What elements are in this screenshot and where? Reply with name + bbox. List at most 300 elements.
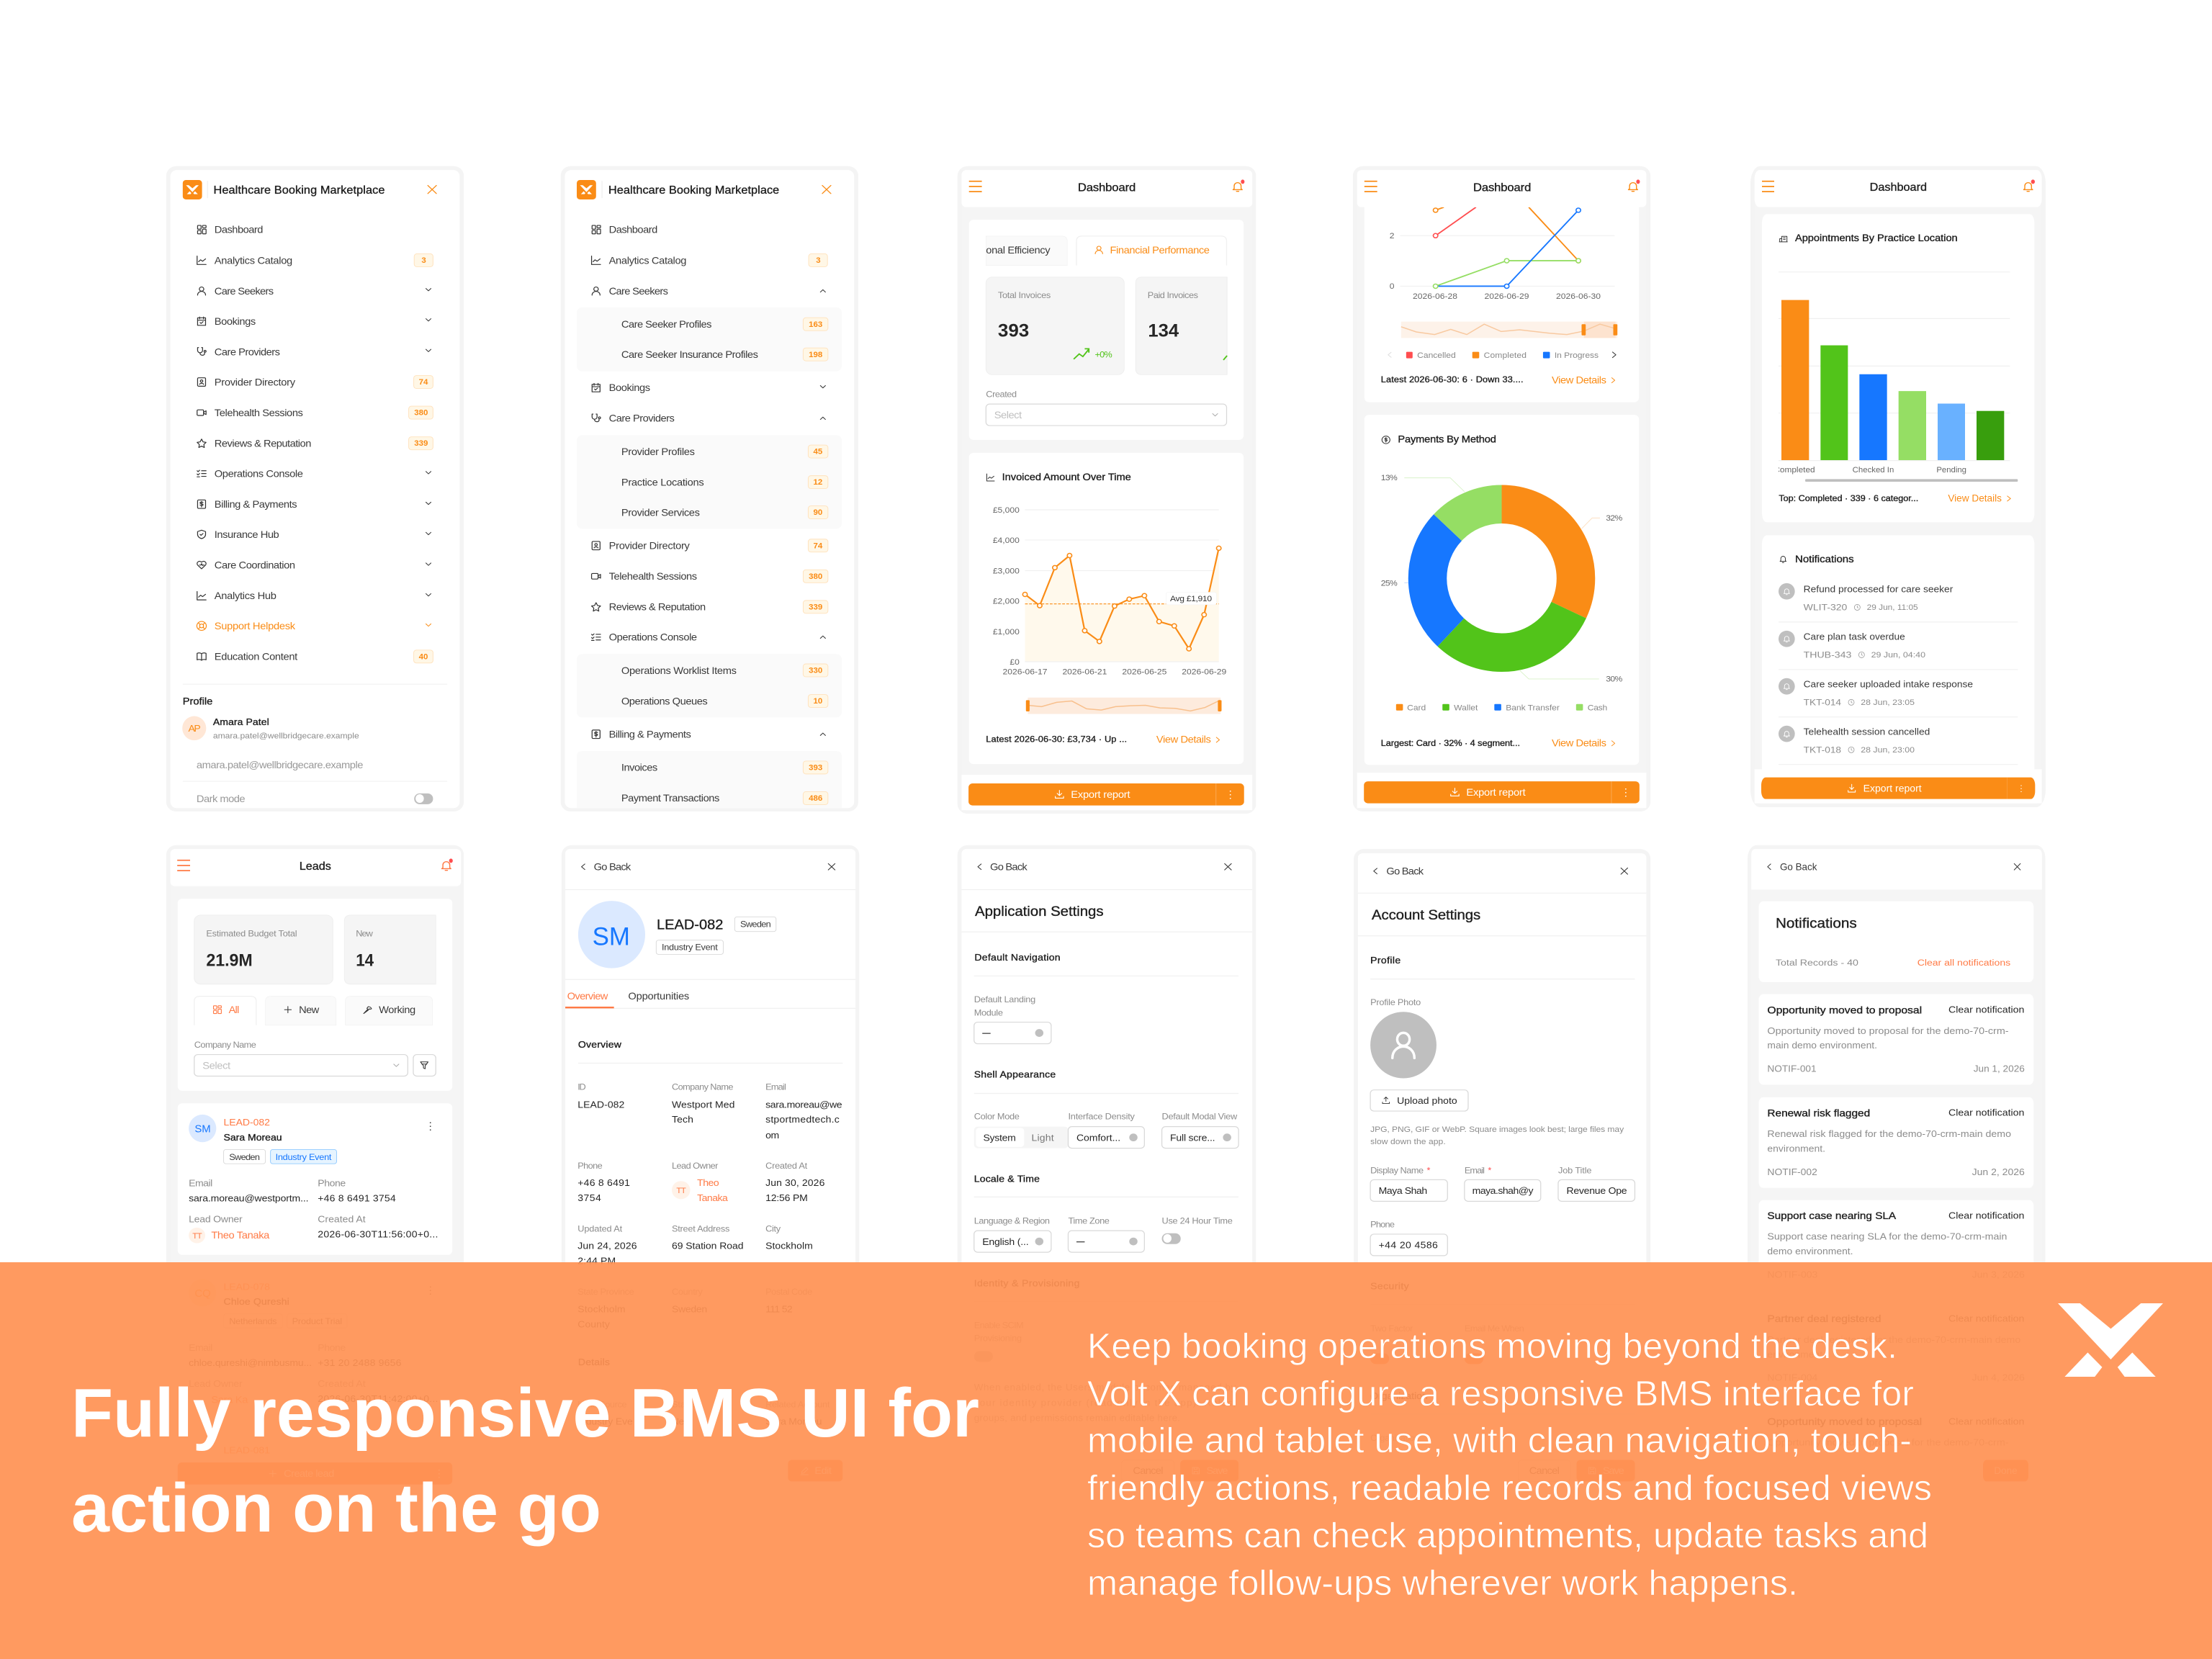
section: shell appearance: System xyxy=(983,1133,1016,1143)
mobile header xyxy=(171,849,461,886)
card: lead Chloe Qureshi: chloe.qureshi@nimbusmu... xyxy=(189,1357,312,1368)
footer buttons: cancel and save xyxy=(1518,1460,1635,1481)
section: security: Security xyxy=(1370,1281,1409,1292)
notification card 4 xyxy=(1758,1303,2033,1394)
card: lead Chloe Qureshi: ⋮ xyxy=(425,1285,436,1297)
footer buttons: cancel and save: Cancel xyxy=(1529,1466,1560,1477)
notification card 2: Clear notification xyxy=(1948,1108,2024,1118)
overview fields xyxy=(577,1039,842,1329)
footer buttons: cancel and save: Save xyxy=(1206,1466,1228,1477)
card: notifications list: 28 Jun, 23:00 xyxy=(1861,745,1915,754)
detail header: go back and close xyxy=(1751,849,2042,890)
notification card 1: Jun 1, 2026 xyxy=(1974,1064,2025,1074)
details fields: Lead Source xyxy=(577,1400,627,1409)
card: lead KPIs, tabs and filter: All xyxy=(229,1004,239,1016)
mobile header: Leads xyxy=(300,860,331,873)
section: default navigation xyxy=(962,932,1252,1044)
notification card 2: environment. xyxy=(1767,1144,1825,1154)
overview fields: Sweden xyxy=(672,1304,707,1314)
card: invoiced amount line chart: Latest 2026-06-30: £3,734 · Up ... xyxy=(986,734,1127,744)
bottom bar: export report button: ⋮ xyxy=(1620,787,1631,799)
card: notifications summary: Total Records - 40 xyxy=(1776,959,1858,968)
card: lead Sara Moreau: ⋮ xyxy=(425,1121,436,1132)
banner description: Volt X can configure a responsive BMS interface for xyxy=(1087,1375,1914,1413)
card: payments by method donut chart: Largest: Card · 32% · 4 segment... xyxy=(1381,738,1520,748)
section: identity and provisioning xyxy=(974,1278,1238,1423)
card: payments by method donut chart: Cash xyxy=(1588,703,1607,713)
expanded navigation list: Bookings xyxy=(609,383,650,394)
expanded navigation list: Reviews & Reputation xyxy=(609,602,706,613)
bottom bar: export report button: Export report xyxy=(1863,783,1923,794)
section: profile form: Display Name xyxy=(1370,1166,1424,1175)
card: invoiced amount line chart: £5,000 xyxy=(993,505,1020,515)
notification card 5: Clear notification xyxy=(1948,1417,2024,1427)
overview fields: Tech xyxy=(672,1115,693,1125)
details fields: Sara Moreau xyxy=(765,1416,822,1426)
notification card 4: Jun 4, 2026 xyxy=(1972,1373,2025,1383)
overview fields: 69 Station Road xyxy=(672,1241,744,1251)
card: lead KPIs, tabs and filter: 21.9M xyxy=(206,951,253,970)
notification card 2 xyxy=(1758,1097,2033,1188)
bottom bar: export report button xyxy=(962,775,1252,810)
section: profile form: Email xyxy=(1465,1166,1485,1175)
bottom bar: create lead button: Create lead xyxy=(284,1468,334,1480)
card: invoiced amount line chart: £4,000 xyxy=(993,536,1020,545)
card: appointments by practice location bar chart: Completed xyxy=(1773,465,1815,474)
overview fields: Created At xyxy=(765,1161,808,1171)
card: status trend line chart: In Progress xyxy=(1555,351,1599,360)
bottom bar: create lead button: ⋮ xyxy=(433,1468,444,1480)
section: profile form: +44 20 4586 xyxy=(1379,1240,1438,1251)
details fields xyxy=(577,1357,830,1426)
card: lead Sara Moreau: Phone xyxy=(318,1178,346,1188)
card: payments by method donut chart xyxy=(1364,415,1639,765)
overview fields: LEAD-082 xyxy=(577,1100,624,1110)
notification card 1: Opportunity moved to proposal for the demo-70-crm- xyxy=(1767,1026,2009,1036)
lead identity: avatar and tags: Sweden xyxy=(740,920,771,930)
card: lead Chloe Qureshi: Created At xyxy=(318,1379,366,1389)
overview fields: County xyxy=(577,1319,610,1329)
card: lead Sara Moreau: LEAD-082 xyxy=(224,1117,270,1128)
card: lead Chloe Qureshi: Netherlands xyxy=(229,1317,277,1326)
section: profile form: JPG, PNG, GIF or WebP. Square images look best; large files may xyxy=(1370,1125,1624,1134)
section: profile form: Revenue Ope xyxy=(1566,1186,1627,1196)
footer: done button xyxy=(1751,1452,2042,1488)
card: lead Sara Moreau: Sweden xyxy=(229,1152,260,1162)
card: lead Sara Moreau: Created At xyxy=(318,1214,366,1225)
expanded navigation list: 486 xyxy=(809,794,822,803)
overview fields: ID xyxy=(577,1082,586,1092)
overview fields: Street Address xyxy=(672,1224,729,1233)
profile section: Profile xyxy=(183,696,212,707)
section: profile form: slow down the app. xyxy=(1370,1138,1446,1146)
section: profile form: Profile Photo xyxy=(1370,998,1421,1007)
overview fields: Stockholm xyxy=(765,1241,813,1251)
banner title: action on the go xyxy=(71,1470,601,1547)
section: locale and time: Time Zone xyxy=(1068,1216,1110,1226)
overview fields: State Province xyxy=(577,1287,634,1297)
card: invoiced amount line chart: Invoiced Amount Over Time xyxy=(1002,472,1131,483)
notification card 4: Partner deal registered for the demo-70-crm-main demo xyxy=(1767,1336,2020,1345)
section: locale and time: Language & Region xyxy=(974,1216,1050,1226)
card: invoiced amount line chart: 2026-06-17 xyxy=(1003,667,1047,676)
card: notifications list: TKT-014 xyxy=(1804,698,1842,708)
card: notifications list: Care seeker uploaded intake response xyxy=(1804,680,1973,690)
card: lead Sara Moreau: Email xyxy=(189,1178,212,1188)
overview fields: 3754 xyxy=(577,1192,601,1203)
expanded navigation list: Operations Queues xyxy=(621,696,708,707)
expanded navigation list: 339 xyxy=(809,603,822,611)
lead identity: avatar and tags: LEAD-082 xyxy=(657,917,723,933)
navigation list: 74 xyxy=(419,378,428,387)
overview fields: Westport Med xyxy=(672,1100,734,1110)
card: notifications summary xyxy=(1758,902,2033,982)
expanded navigation list: Care Seeker Insurance Profiles xyxy=(621,349,758,361)
banner description xyxy=(1087,1327,1932,1603)
card: lead Sara Moreau: +46 8 6491 3754 xyxy=(318,1193,396,1203)
mobile header xyxy=(962,170,1252,207)
navigation list: Provider Directory xyxy=(215,377,296,388)
card: notifications list: TKT-018 xyxy=(1804,746,1841,755)
card: payments by method donut chart: Card xyxy=(1407,703,1426,713)
banner description: friendly actions, readable records and focused views xyxy=(1087,1469,1932,1508)
card: payments by method donut chart: Bank Transfer xyxy=(1506,703,1560,713)
card: status trend line chart: Cancelled xyxy=(1417,351,1456,360)
section: profile form: maya.shah@y xyxy=(1473,1186,1534,1196)
section: security: Email Me When xyxy=(1465,1323,1524,1334)
expanded navigation list: 74 xyxy=(813,542,823,550)
card: lead Chloe Qureshi: Lead Owner xyxy=(189,1379,243,1389)
expanded navigation list: Practice Locations xyxy=(621,477,704,488)
section: locale and time: Use 24 Hour Time xyxy=(1162,1216,1233,1226)
notification card 5 xyxy=(1758,1406,2033,1457)
expanded navigation list: 90 xyxy=(813,508,822,517)
section: shell appearance: Comfort... xyxy=(1076,1133,1120,1143)
card: appointments by practice location bar chart: Top: Completed · 339 · 6 categor... xyxy=(1779,494,1918,504)
section: default navigation: Default Landing xyxy=(974,994,1035,1004)
phone screen: lead detail xyxy=(562,845,859,1491)
details fields: New xyxy=(672,1416,691,1426)
section: identity and provisioning: Provisioning xyxy=(974,1334,1022,1344)
section: locale and time xyxy=(974,1174,1238,1252)
overview fields: sara.moreau@we xyxy=(765,1100,842,1110)
card: tabs and KPI stats: Financial Performance xyxy=(1110,245,1210,256)
banner description: manage follow-ups wherever work happens. xyxy=(1087,1564,1798,1603)
overview fields: Stockholm xyxy=(577,1304,626,1314)
navigation list: 3 xyxy=(421,256,426,265)
overview fields: 2:44 PM xyxy=(577,1256,616,1266)
expanded navigation list: Billing & Payments xyxy=(609,729,691,740)
card: tabs and KPI stats xyxy=(969,220,1244,440)
card: tabs and KPI stats: Total Invoices xyxy=(998,291,1051,300)
navigation list: Operations Console xyxy=(215,469,303,480)
section: profile form: * xyxy=(1427,1166,1431,1175)
phone screen: dashboard KPIs and line chart xyxy=(958,166,1256,814)
phone screen: leads list xyxy=(166,845,464,1491)
phone screen: dashboard bar chart and notifications xyxy=(1750,166,2046,807)
expanded navigation list: 163 xyxy=(809,320,822,329)
card: lead Chloe Qureshi: LEAD-081 xyxy=(224,1445,270,1455)
expanded navigation list: Operations Worklist Items xyxy=(621,665,737,677)
banner description: Keep booking operations moving beyond the desk. xyxy=(1087,1327,1897,1366)
overview fields: City xyxy=(765,1224,781,1233)
card: notifications list: 29 Jun, 11:05 xyxy=(1867,603,1918,612)
bottom bar: export report button xyxy=(1357,773,1646,808)
phone screen: dashboard multi-line chart and donut xyxy=(1353,166,1650,811)
app header: logo and title: Healthcare Booking Marketplace xyxy=(608,185,779,197)
notification card 3: demo environment. xyxy=(1767,1247,1853,1257)
card: tabs and KPI stats: 393 xyxy=(998,320,1029,341)
footer buttons: cancel and save xyxy=(1121,1460,1238,1481)
card: tabs and KPI stats: Created xyxy=(986,390,1017,399)
card: notifications list: Telehealth session cancelled xyxy=(1804,727,1930,737)
expanded navigation list: Provider Profiles xyxy=(621,446,695,458)
expanded navigation list: 10 xyxy=(813,697,822,706)
card: lead Chloe Qureshi: 2026-06-30T11:42:00+0... xyxy=(318,1394,438,1404)
overview fields: 12:56 PM xyxy=(765,1192,808,1203)
section: profile form xyxy=(1358,936,1646,1256)
card: lead Sara Moreau: Theo Tanaka xyxy=(211,1230,269,1241)
detail header: go back and close xyxy=(1358,866,1646,893)
section: identity and provisioning: Enable SCIM xyxy=(974,1321,1024,1331)
detail header: go back and close: Go Back xyxy=(1386,866,1424,877)
section: organization xyxy=(1370,1390,1635,1443)
card: tabs and KPI stats: 134 xyxy=(1148,320,1179,341)
notification card 3: Support case nearing SLA xyxy=(1767,1210,1896,1221)
section: profile form: Job Title xyxy=(1558,1166,1592,1175)
section: default navigation: Default Navigation xyxy=(974,952,1061,963)
notification card 3 xyxy=(1758,1200,2033,1290)
section: shell appearance xyxy=(974,1069,1238,1148)
card: payments by method donut chart: View Details xyxy=(1552,738,1606,749)
card: appointments by practice location bar chart: View Details xyxy=(1948,493,2002,504)
card: notifications list: Notifications xyxy=(1795,554,1854,565)
phone screen: notifications xyxy=(1748,845,2046,1491)
card: tabs and KPI stats: Paid Invoices xyxy=(1148,291,1198,300)
overview fields: Theo xyxy=(697,1177,719,1188)
card: status trend line chart: 2026-06-30 xyxy=(1556,292,1601,301)
bottom bar: export report button xyxy=(1755,769,2042,804)
detail header: go back and close: Go Back xyxy=(990,862,1028,873)
mobile header: Dashboard xyxy=(1078,181,1136,194)
footer buttons: cancel and save: Save xyxy=(1603,1466,1624,1477)
notification card 5: Opportunity moved to proposal xyxy=(1767,1416,1922,1427)
card: appointments by practice location bar chart: Checked In xyxy=(1853,465,1894,474)
card: tabs and KPI stats: Select xyxy=(994,410,1022,421)
mobile header xyxy=(1357,170,1646,207)
section: locale and time: English (... xyxy=(982,1236,1029,1247)
overview fields: Lead Owner xyxy=(672,1161,718,1171)
card: notifications list: Refund processed for care seeker xyxy=(1804,585,1954,595)
card: appointments by practice location bar chart: Appointments By Practice Location xyxy=(1795,233,1958,244)
detail header: go back and close: Go Back xyxy=(1780,861,1817,873)
card: invoiced amount line chart: Avg £1,910 xyxy=(1170,594,1213,603)
expanded navigation list: Provider Directory xyxy=(609,541,691,552)
navigation list: Education Content xyxy=(215,652,297,662)
details fields: Status xyxy=(672,1400,698,1409)
bottom bar: export report button: Export report xyxy=(1466,787,1526,799)
notification card 4: environment. xyxy=(1767,1350,1825,1360)
overview fields: Updated At xyxy=(577,1224,623,1233)
card: invoiced amount line chart: 2026-06-29 xyxy=(1182,667,1226,676)
card: lead Sara Moreau: 2026-06-30T11:56:00+0... xyxy=(318,1229,438,1240)
expanded navigation list: Care Seekers xyxy=(609,286,668,297)
notification card 1: Opportunity moved to proposal xyxy=(1767,1004,1922,1016)
card: lead Sara Moreau: Sara Moreau xyxy=(224,1132,282,1143)
notification card 2: Renewal risk flagged for the demo-70-crm-main demo xyxy=(1767,1130,2011,1139)
mobile header: Dashboard xyxy=(1473,181,1531,194)
card: notifications list xyxy=(1762,535,2034,777)
card: notifications list: 29 Jun, 04:40 xyxy=(1871,650,1925,659)
navigation list: Dashboard xyxy=(215,225,263,236)
notification card 1: Clear notification xyxy=(1948,1005,2024,1015)
notification card 1: main demo environment. xyxy=(1767,1041,1877,1051)
navigation list: 339 xyxy=(414,440,428,448)
card: invoiced amount line chart: 2026-06-25 xyxy=(1122,667,1167,676)
card: lead Chloe Qureshi: Product Trial xyxy=(292,1317,342,1326)
expanded navigation list: Operations Console xyxy=(609,632,697,644)
section: profile form: Profile xyxy=(1370,955,1401,966)
navigation list: Analytics Hub xyxy=(215,590,276,602)
card: lead Sara Moreau: Industry Event xyxy=(276,1152,332,1162)
navigation list xyxy=(197,225,433,663)
expanded navigation list: Invoices xyxy=(621,763,657,774)
card: payments by method donut chart: 25% xyxy=(1381,579,1398,588)
overview fields: Country xyxy=(672,1287,703,1297)
card: appointments by practice location bar chart xyxy=(1762,214,2034,522)
card: payments by method donut chart: Wallet xyxy=(1454,703,1478,713)
banner title xyxy=(71,1375,979,1547)
lead identity: avatar and tags: SM xyxy=(593,922,630,950)
overview fields: Postal Code xyxy=(765,1287,812,1297)
card: lead KPIs, tabs and filter: Working xyxy=(379,1004,415,1016)
heading: application settings: Application Settings xyxy=(975,904,1104,920)
details fields: Details xyxy=(578,1357,610,1367)
card: lead Sara Moreau: Lead Owner xyxy=(189,1214,243,1225)
notification card 5: Opportunity moved to proposal for the demo-70-crm- xyxy=(1767,1438,2009,1448)
profile section xyxy=(182,684,447,805)
card: notifications list: THUB-343 xyxy=(1804,651,1851,660)
card: lead Sara Moreau xyxy=(178,1103,452,1255)
navigation list: Billing & Payments xyxy=(215,499,297,511)
expanded navigation list: Payment Transactions xyxy=(621,793,719,804)
navigation list: Care Coordination xyxy=(215,560,295,571)
card: payments by method donut chart: 30% xyxy=(1606,675,1623,683)
expanded navigation list: 330 xyxy=(809,667,822,675)
card: lead KPIs, tabs and filter xyxy=(178,899,452,1091)
phone screen: account settings xyxy=(1354,849,1650,1491)
navigation list: Insurance Hub xyxy=(215,529,279,541)
phone screen: application settings xyxy=(958,845,1256,1491)
expanded navigation list: 3 xyxy=(816,256,821,265)
notification card 3: Support case nearing SLA for the demo-70-crm-main xyxy=(1767,1232,2007,1242)
card: invoiced amount line chart: 2026-06-21 xyxy=(1062,667,1107,676)
profile section: AP xyxy=(188,723,201,734)
profile section: Amara Patel xyxy=(213,717,269,727)
navigation list: Reviews & Reputation xyxy=(215,439,311,449)
banner title: Fully responsive BMS UI for xyxy=(71,1375,979,1452)
section: profile form: Phone xyxy=(1370,1220,1395,1229)
banner: orange overlay xyxy=(0,1262,2212,1659)
detail tabs: Opportunities xyxy=(628,991,689,1002)
bottom bar: export report button: Export report xyxy=(1071,789,1130,801)
expanded navigation list: 393 xyxy=(809,764,822,772)
section: identity and provisioning: When enabled, the Users module becomes managed by xyxy=(974,1382,1236,1393)
overview fields: Jun 24, 2026 xyxy=(577,1241,637,1251)
card: status trend line chart: 0 xyxy=(1390,282,1395,291)
expanded navigation list xyxy=(577,225,842,808)
bottom bar: export report button: ⋮ xyxy=(1225,789,1236,801)
notification card 1 xyxy=(1758,994,2033,1085)
card: lead KPIs, tabs and filter: Select xyxy=(202,1061,230,1071)
card: notifications summary: Clear all notifications xyxy=(1917,959,2010,968)
overview fields: stportmedtech.c xyxy=(765,1115,840,1125)
section: profile form: Upload photo xyxy=(1397,1095,1457,1106)
navigation list: Analytics Catalog xyxy=(215,256,292,266)
section: shell appearance: Default Modal View xyxy=(1162,1112,1237,1121)
card: lead KPIs, tabs and filter: Company Name xyxy=(194,1040,256,1050)
app header: logo and title xyxy=(577,180,831,199)
section: shell appearance: Light xyxy=(1031,1133,1054,1143)
detail tabs xyxy=(565,991,689,1008)
navigation list: Telehealth Sessions xyxy=(215,408,303,419)
notification card 1: NOTIF-001 xyxy=(1767,1064,1817,1074)
navigation list: Bookings xyxy=(215,316,256,328)
card: payments by method donut chart: 13% xyxy=(1381,474,1398,482)
card: lead Sara Moreau: TT xyxy=(192,1232,202,1241)
mobile header: Dashboard xyxy=(1870,181,1927,194)
card: notifications list: 28 Jun, 23:05 xyxy=(1861,698,1915,706)
footer: done button: Done xyxy=(1994,1465,2018,1477)
card: lead Chloe Qureshi xyxy=(178,1268,452,1457)
banner description: so teams can check appointments, update tasks and xyxy=(1087,1516,1928,1555)
section: organization: Organization xyxy=(1370,1433,1419,1443)
card: invoiced amount line chart: £2,000 xyxy=(993,597,1020,606)
navigation list: Support Helpdesk xyxy=(215,621,296,632)
card: payments by method donut chart: 32% xyxy=(1606,513,1623,523)
section: profile form: * xyxy=(1488,1166,1492,1175)
footer buttons: cancel and save: Cancel xyxy=(1133,1466,1163,1477)
card: status trend line chart xyxy=(1364,207,1639,403)
section: shell appearance: Shell Appearance xyxy=(974,1069,1056,1079)
overview fields: Tanaka xyxy=(697,1192,728,1203)
section: default navigation: Module xyxy=(974,1008,1003,1017)
detail header: go back and close: Go Back xyxy=(594,862,631,873)
card: payments by method donut chart: Payments By Method xyxy=(1398,434,1496,445)
card: lead KPIs, tabs and filter: New xyxy=(356,929,373,938)
card: lead Sara Moreau: sara.moreau@westportm... xyxy=(189,1193,309,1203)
notification card 3: Jun 3, 2026 xyxy=(1972,1270,2025,1280)
app header: logo and title: Healthcare Booking Marketplace xyxy=(214,185,385,197)
card: status trend line chart: View Details xyxy=(1552,375,1606,386)
card: status trend line chart: 2026-06-29 xyxy=(1485,292,1529,301)
navigation list: Care Seekers xyxy=(215,286,274,297)
expanded navigation list: 45 xyxy=(813,448,822,457)
edit button: Edit xyxy=(814,1466,832,1477)
edit button xyxy=(788,1460,842,1481)
section: shell appearance: Color Mode xyxy=(974,1112,1020,1121)
section: identity and provisioning: Identity & Provisioning xyxy=(974,1278,1079,1288)
card: notifications list: WLIT-320 xyxy=(1804,603,1848,613)
banner description: mobile and tablet use, with clean navigation, touch- xyxy=(1087,1421,1912,1460)
card: lead Chloe Qureshi: Chloe Qureshi xyxy=(224,1297,289,1307)
expanded navigation list: 198 xyxy=(809,351,822,359)
section: identity and provisioning: your identity provider (read-only in the app). Roles, xyxy=(974,1398,1236,1408)
notification card 2: Renewal risk flagged xyxy=(1767,1107,1870,1119)
card: notifications summary: Notifications xyxy=(1776,915,1857,931)
card: invoiced amount line chart xyxy=(969,453,1244,764)
lead identity: avatar and tags xyxy=(565,901,855,1008)
